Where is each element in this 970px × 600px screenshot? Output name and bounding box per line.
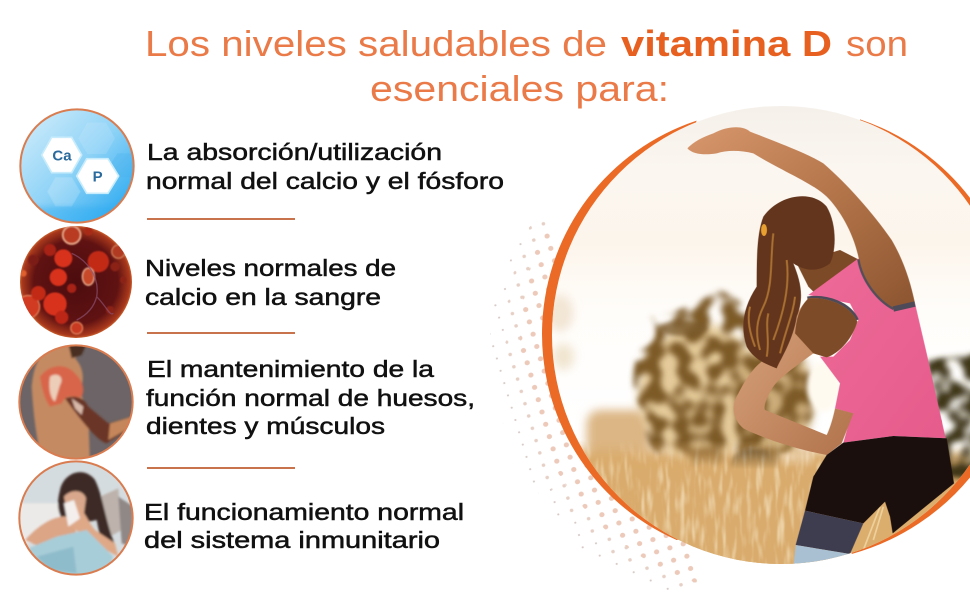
title: esenciales para: [370,68,669,109]
text: immune system [144,499,464,553]
text: immune system: El funcionamiento normal [144,499,464,525]
photo: woman stretching outdoors [542,106,970,573]
title [145,23,908,109]
text: calcium in blood [145,255,396,310]
leggings [805,436,954,533]
text: bones, teeth and muscles [146,356,475,439]
text: calcium and phosphorus absorption [146,139,504,194]
text: bones, teeth and muscles: dientes y músculos [146,413,385,439]
text: calcium and phosphorus absorption: normal del calcio y el fósforo [146,168,504,194]
text: calcium in blood: calcio en la sangre [145,284,381,310]
icon: calcium and phosphorus hexagons: P [93,169,103,186]
tree mottled leaves [633,290,817,487]
grass [578,442,830,564]
right tree [927,353,970,480]
text: immune system: del sistema inmunitario [144,527,440,553]
raised arm and back [687,127,915,309]
icon: calcium and phosphorus hexagons [20,109,138,227]
tree soft body [638,323,813,463]
halftone dots [490,222,697,590]
neck [798,250,858,292]
icon: woman blowing her nose [17,461,133,580]
icon: shoulder muscles [19,343,133,463]
title: son [846,23,908,64]
title: vitamina D [621,23,832,64]
text: bones, teeth and muscles: función normal de huesos, [146,385,475,411]
text: calcium in blood: Niveles normales de [145,255,396,281]
bright gap behind the arm [780,362,840,468]
hair [743,196,835,368]
icon: blood cells [17,226,132,338]
tank top [808,258,946,443]
icon: calcium and phosphorus hexagons: Ca [52,148,72,165]
straps [858,259,893,309]
title: Los niveles saludables de [145,23,607,64]
lower arm and hand [734,298,857,455]
text: bones, teeth and muscles: El mantenimiento de la [147,356,434,382]
text: calcium and phosphorus absorption: La absorción/utilización [147,139,442,165]
